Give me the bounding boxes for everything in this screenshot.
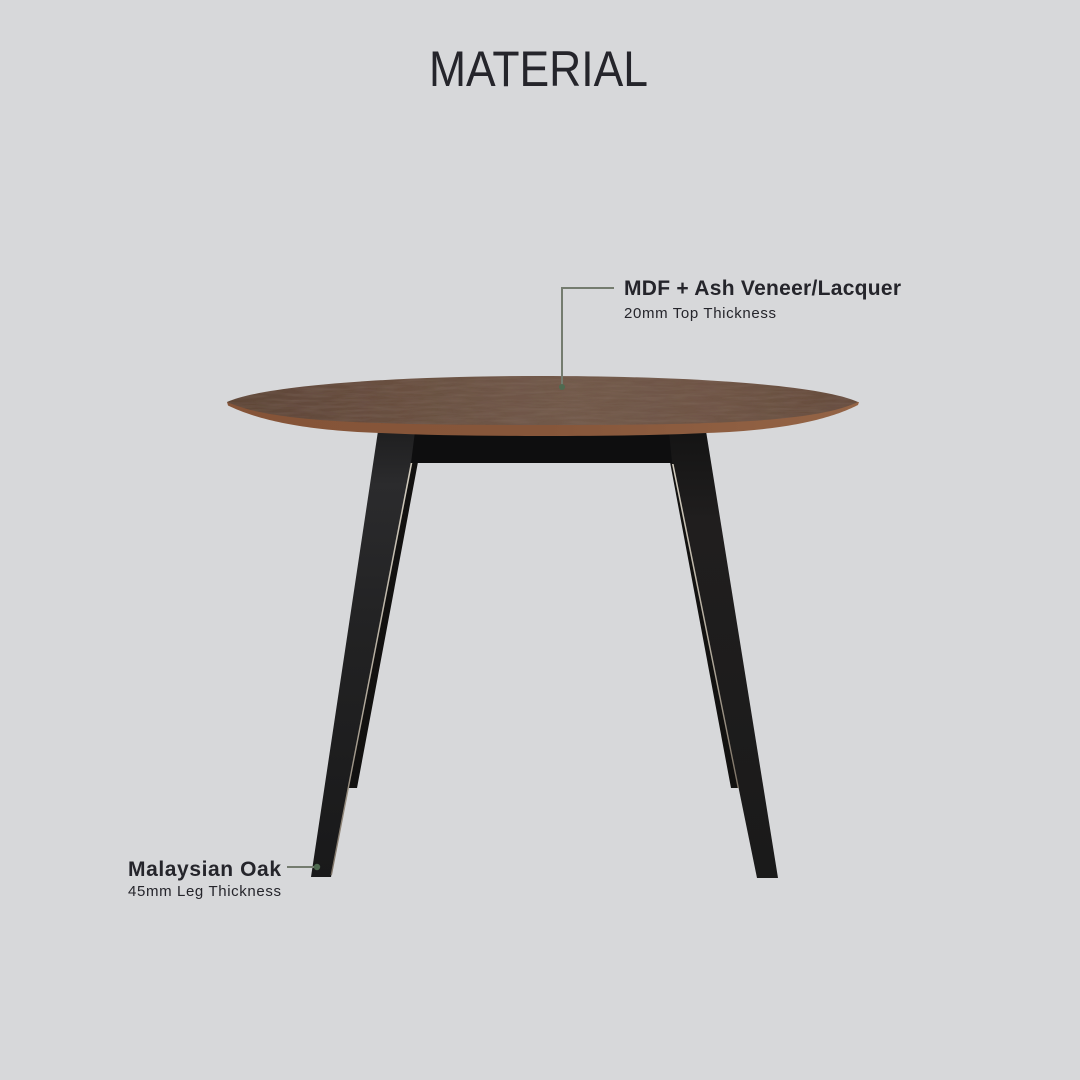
front right leg <box>669 431 778 878</box>
rear right leg <box>670 462 739 788</box>
text: table top thickness: 20mm Top Thickness <box>624 305 776 322</box>
callout: leg <box>128 858 320 900</box>
table top rim <box>227 402 859 436</box>
leader line: table top <box>562 288 614 388</box>
leader dot: table top <box>559 384 565 390</box>
callout: table top <box>559 277 901 390</box>
table top surface <box>227 376 858 425</box>
leader line: leg <box>287 866 316 868</box>
rear left leg <box>348 462 418 788</box>
title: MATERIAL <box>429 41 648 97</box>
leader dot: leg <box>314 864 320 870</box>
table illustration <box>227 376 859 878</box>
apron <box>410 432 675 463</box>
heading: table top material: MDF + Ash Veneer/Lacquer <box>624 277 901 300</box>
text: leg thickness: 45mm Leg Thickness <box>128 883 281 900</box>
front left leg <box>311 431 415 877</box>
heading: leg material: Malaysian Oak <box>128 858 281 881</box>
